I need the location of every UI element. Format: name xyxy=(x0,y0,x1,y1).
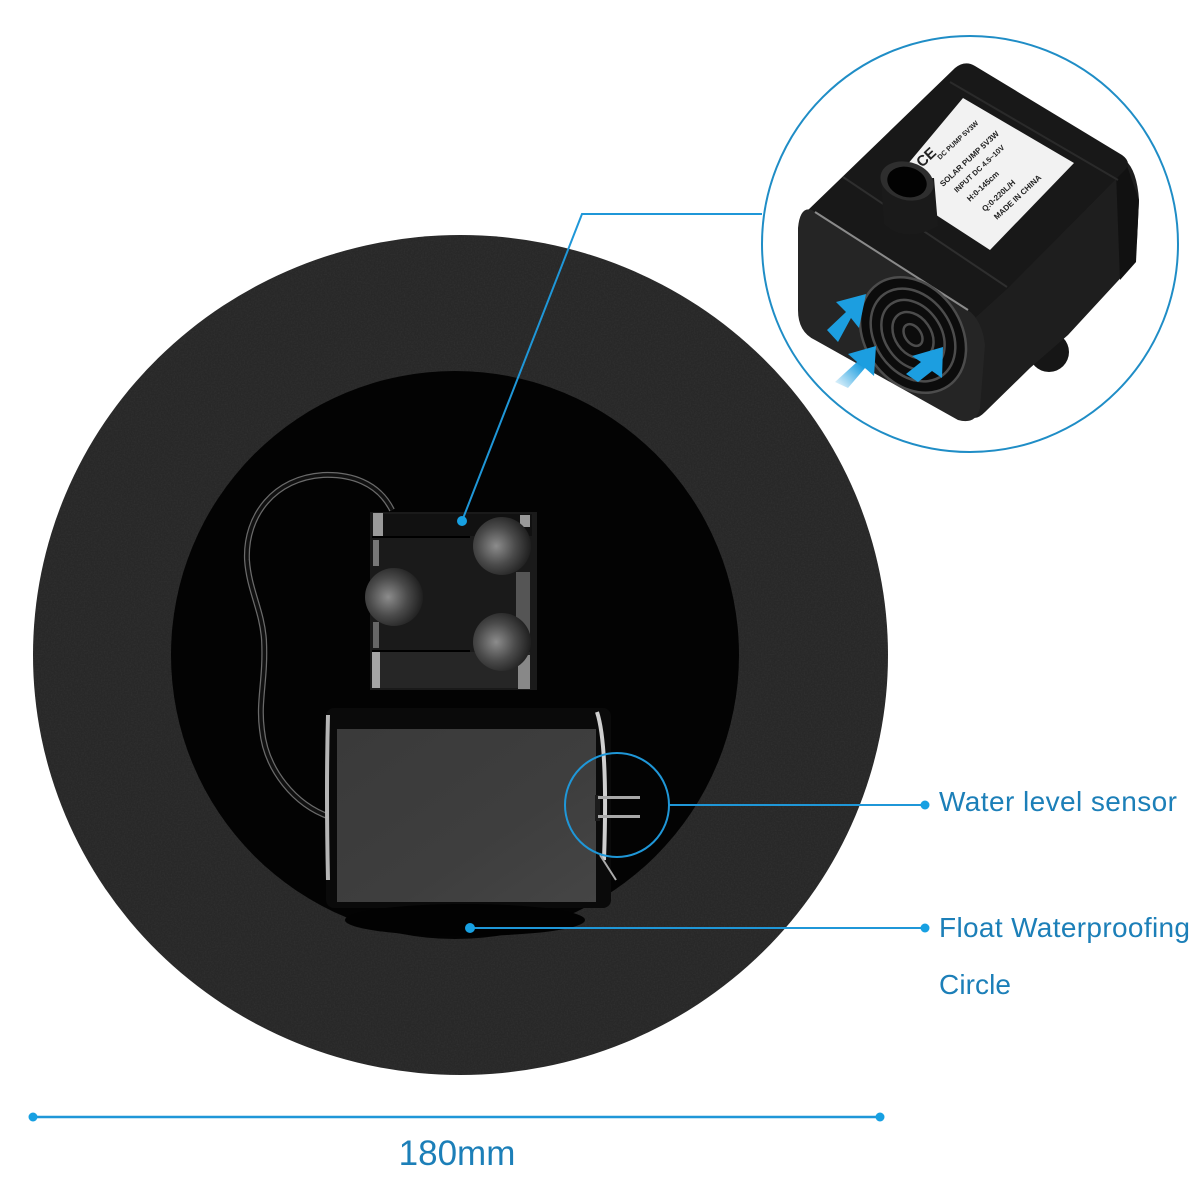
float box xyxy=(326,708,616,936)
spec label: MADE IN CHINA xyxy=(992,173,1043,221)
callout: water level sensor: Water level sensor xyxy=(939,786,1177,817)
spec label: H:0-145cm xyxy=(965,169,1001,203)
float foam disc xyxy=(33,235,888,1075)
dimension: 180mm xyxy=(28,1112,884,1173)
water outlet xyxy=(876,156,938,235)
pump top face xyxy=(806,63,1128,318)
spec label: Q:0-220L/H xyxy=(980,178,1017,213)
pump front face xyxy=(798,209,985,421)
suction cups xyxy=(473,517,531,575)
callout: float waterproofing circle xyxy=(465,912,1190,1000)
spec label: INPUT DC 4.5~10V xyxy=(952,143,1006,194)
callout: float waterproofing circle: Float Waterproofing xyxy=(939,912,1190,943)
callout: water level sensor xyxy=(565,753,1177,857)
spec label: SOLAR PUMP 5V3W xyxy=(938,129,1001,188)
pump side face xyxy=(970,160,1139,418)
sensor pins xyxy=(595,795,640,821)
pump outlet foot xyxy=(1029,332,1069,372)
blue flow arrows xyxy=(827,294,943,388)
callout: pump leader line xyxy=(457,214,762,526)
spec label: CE xyxy=(913,144,940,171)
dimension: 180mm: 180mm xyxy=(399,1134,515,1173)
pump underside xyxy=(365,512,537,690)
callout: float waterproofing circle: Circle xyxy=(939,969,1011,1000)
power cable xyxy=(247,475,392,817)
spec label xyxy=(892,98,1074,250)
inner hole xyxy=(171,371,739,939)
intake grille xyxy=(838,257,988,413)
inset: submersible pump xyxy=(798,63,1139,421)
spec label: DC PUMP 5V3W xyxy=(937,120,981,161)
callout: inset circle xyxy=(762,36,1178,452)
